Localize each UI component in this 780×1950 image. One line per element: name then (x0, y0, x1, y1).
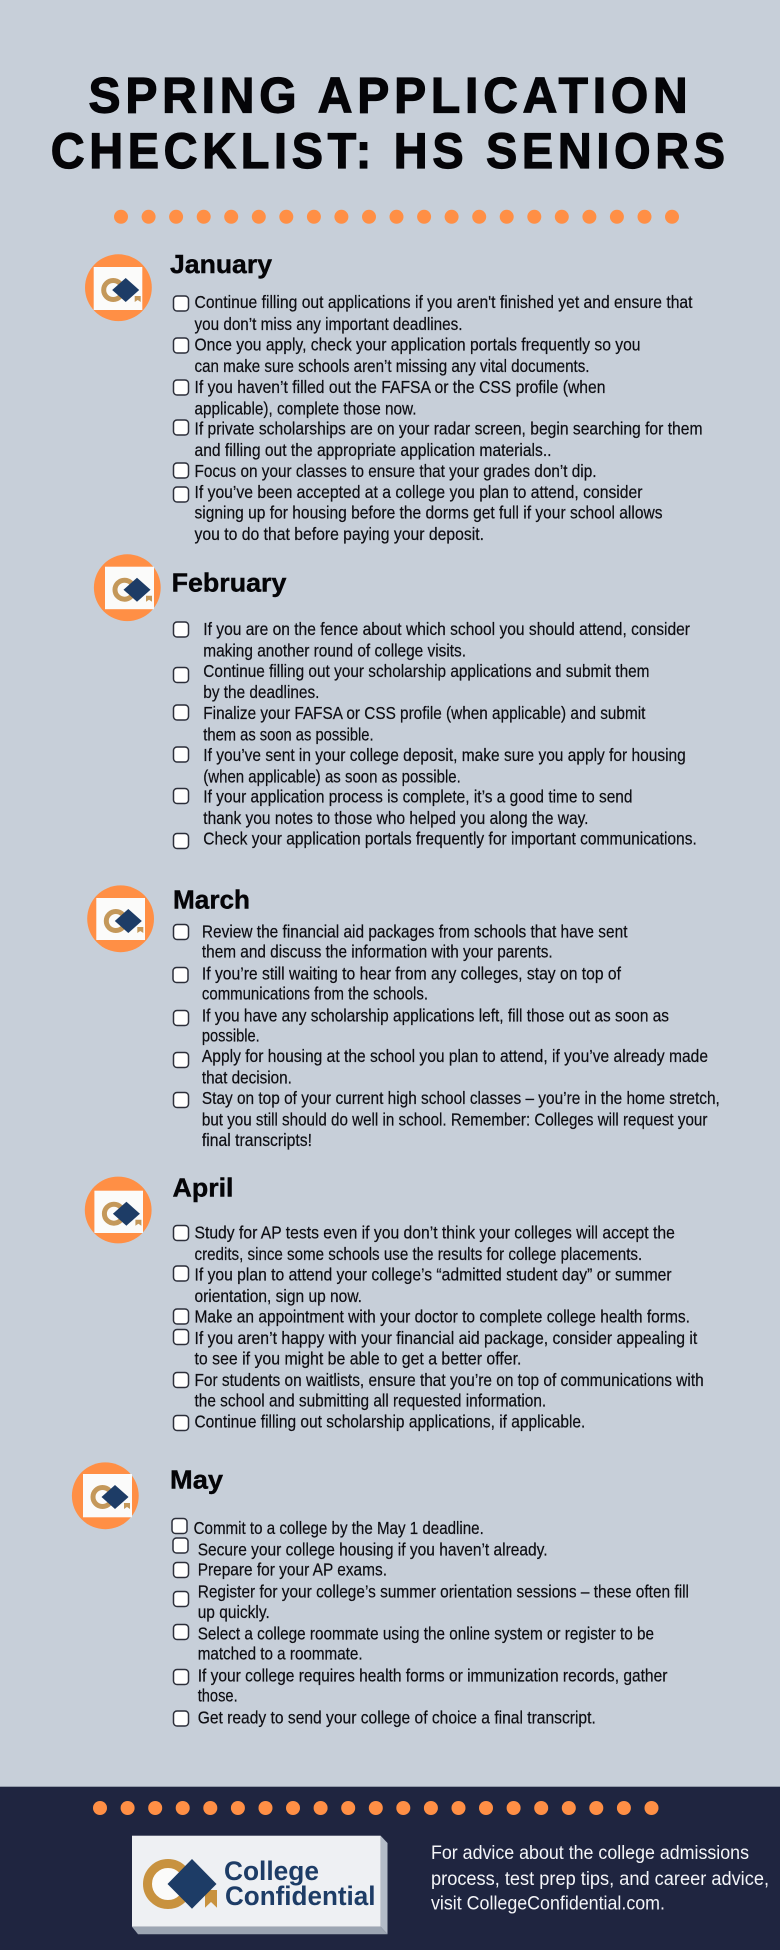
checklist item: check portals: can make sure schools aren’t missing any vital documents. (194, 356, 590, 376)
checklist item: private scholarships (174, 418, 702, 460)
checklist item: waitlists: the school and submitting all requested information. (194, 1390, 546, 1410)
checklist item: waiting to hear: If you’re still waiting to hear from any colleges, stay on top of (202, 963, 621, 983)
checklist item: appeal financial aid: If you aren’t happy with your financial aid package, consider appealing it (194, 1328, 697, 1348)
checklist item: health forms: those. (198, 1686, 238, 1706)
checklist item: health forms: Make an appointment with your doctor to complete college health forms. (194, 1306, 690, 1326)
checklist item: scholarship applications (174, 661, 650, 702)
checklist item: housing: you to do that before paying your deposit. (194, 524, 484, 544)
checklist item: roommate: matched to a roommate. (198, 1644, 363, 1664)
heading: April: April (172, 1173, 234, 1203)
checklist item: college visits (174, 619, 690, 660)
checklist item: summer orientation (174, 1581, 689, 1622)
checklist item: health forms: If your college requires health forms or immunization records, gather (198, 1665, 668, 1685)
checklist item: finalize FAFSA: Finalize your FAFSA or CSS profile (when applicable) and submit (203, 703, 646, 723)
title: CHECKLIST: HS SENIORS (51, 123, 730, 179)
checklist item: check portals: Check your application portals frequently for important communications. (203, 829, 697, 849)
checklist item: health forms (174, 1665, 668, 1706)
checklist item: private scholarships: and filling out the appropriate application materials.. (194, 440, 552, 460)
checklist item: roommate (174, 1623, 654, 1664)
checklist item: AP tests: Study for AP tests even if you don’t think your colleges will accept the (194, 1222, 675, 1242)
checklist item: high school classes (174, 1088, 720, 1150)
checklist item: AP tests: credits, since some schools use the results for college placements. (194, 1244, 642, 1264)
logo wordmark (224, 1856, 376, 1911)
checklist item: continue applications: Continue filling out applications if you aren't finished yet and ensure that (194, 292, 693, 312)
checklist item: summer orientation: up quickly. (198, 1602, 270, 1622)
checklist item: waitlists: For students on waitlists, ensure that you’re on top of communications with (194, 1370, 704, 1390)
checklist item: high school classes: Stay on top of your current high school classes – you’re in the home stretch, (202, 1088, 720, 1108)
icon: logo mark (148, 1859, 217, 1909)
checklist item: focus on classes: Focus on your classes to ensure that your grades don’t dip. (194, 461, 596, 481)
checklist item: college visits: If you are on the fence about which school you should attend, consider (203, 619, 690, 639)
checklist item: high school classes: final transcripts! (202, 1130, 312, 1150)
checklist item: scholarship applications: by the deadlines. (203, 682, 319, 702)
checklist item: finalize FAFSA: them as soon as possible. (203, 724, 374, 744)
checklist item: thank you notes: thank you notes to those who helped you along the way. (203, 808, 589, 828)
dotted divider: top (114, 210, 679, 224)
checklist item: apply for housing: Apply for housing at the school you plan to attend, if you’ve already made (202, 1046, 708, 1066)
panel: April (85, 1173, 704, 1432)
checklist item: admitted student day (174, 1264, 672, 1306)
icon: January logo badge (85, 254, 152, 321)
checklist item: apply for housing: that decision. (202, 1068, 292, 1088)
checklist item: check portals (174, 335, 640, 376)
checklist item: scholarship applications: Continue filling out your scholarship applications and submit them (203, 661, 650, 681)
checklist item: apply for housing (174, 745, 686, 786)
checklist item: financial aid packages: them and discuss the information with your parents. (202, 942, 553, 962)
heading: May: May (170, 1464, 224, 1494)
logo wordmark: College (224, 1856, 319, 1886)
icon: February logo badge (94, 554, 161, 621)
checklist item: continue applications (174, 292, 693, 334)
icon: April logo badge (85, 1177, 152, 1243)
checklist item: scholarship applications: Continue filling out scholarship applications, if applicable. (194, 1412, 585, 1432)
checklist item: housing: If you’ve been accepted at a college you plan to attend, consider (194, 482, 643, 502)
checklist item: FAFSA or CSS: applicable), complete those now. (194, 399, 416, 419)
checklist item: finalize FAFSA (174, 703, 646, 744)
checklist item: scholarship applications (174, 1005, 669, 1046)
checklist item: private scholarships: If private scholarships are on your radar screen, begin searching for them (194, 418, 702, 438)
icon: May logo badge (72, 1462, 139, 1529)
College Confidential logo card (132, 1836, 388, 1934)
checklist item: AP exams: Prepare for your AP exams. (198, 1560, 387, 1580)
panel: footer (0, 1787, 780, 1950)
checklist item: high school classes: but you still should do well in school. Remember: Colleges will request your (202, 1110, 708, 1130)
checklist item: apply for housing (174, 1046, 708, 1088)
checklist item: thank you notes: If your application process is complete, it’s a good time to send (203, 787, 633, 807)
checklist item: thank you notes (174, 787, 632, 828)
checklist item: roommate: Select a college roommate using the online system or register to be (198, 1623, 654, 1643)
footer text (431, 1843, 769, 1914)
dotted divider: footer (93, 1801, 658, 1815)
checklist item: admitted student day: orientation, sign up now. (194, 1286, 362, 1306)
logo wordmark: Confidential (225, 1881, 376, 1911)
footer text: For advice about the college admissions (431, 1843, 749, 1864)
panel: January (85, 249, 702, 544)
checklist item: college housing: Secure your college housing if you haven’t already. (198, 1539, 548, 1559)
checklist item: apply for housing: If you’ve sent in your college deposit, make sure you apply for housing (203, 745, 686, 765)
checklist item: continue applications: you don’t miss any important deadlines. (194, 314, 462, 334)
checklist item: apply for housing: (when applicable) as soon as possible. (203, 766, 461, 786)
checklist item: AP tests (174, 1222, 675, 1264)
icon: March logo badge (87, 885, 154, 952)
panel: March (87, 884, 720, 1150)
checklist item: summer orientation: Register for your college’s summer orientation sessions – these often fill (198, 1581, 689, 1601)
checklist item: financial aid packages (174, 921, 628, 962)
heading: January: January (170, 249, 273, 279)
checklist item: scholarship applications: possible. (202, 1026, 260, 1046)
heading: February: February (172, 568, 287, 598)
checklist item: waitlists (174, 1370, 704, 1410)
checklist item: college visits: making another round of college visits. (203, 640, 466, 660)
checklist item: FAFSA or CSS (174, 377, 606, 419)
checklist item: housing: signing up for housing before the dorms get full if your school allows (194, 502, 663, 522)
checklist item: appeal financial aid: to see if you might be able to get a better offer. (194, 1348, 521, 1368)
checklist item: financial aid packages: Review the financial aid packages from schools that have sent (202, 921, 628, 941)
checklist item: appeal financial aid (174, 1328, 697, 1368)
footer text: process, test prep tips, and career advice, (431, 1869, 769, 1890)
checklist item: housing (174, 482, 663, 544)
panel: February (94, 554, 697, 849)
checklist item: commit to a college: Commit to a college by the May 1 deadline. (194, 1518, 484, 1538)
title (51, 68, 730, 179)
checklist item: scholarship applications: If you have any scholarship applications left, fill those out as soon as (202, 1005, 669, 1025)
checklist item: admitted student day: If you plan to attend your college’s “admitted student day” or summer (194, 1264, 672, 1284)
checklist item: final transcript: Get ready to send your college of choice a final transcript. (198, 1707, 596, 1727)
checklist item: check portals: Once you apply, check your application portals frequently so you (194, 335, 640, 355)
checklist item: FAFSA or CSS: If you haven’t filled out the FAFSA or the CSS profile (when (194, 377, 606, 397)
checklist item: waiting to hear (173, 963, 621, 1004)
checklist item: waiting to hear: communications from the schools. (202, 984, 428, 1004)
heading: March: March (173, 884, 250, 914)
panel: May (72, 1462, 689, 1727)
title: SPRING APPLICATION (88, 68, 692, 124)
footer text: visit CollegeConfidential.com. (431, 1893, 665, 1914)
